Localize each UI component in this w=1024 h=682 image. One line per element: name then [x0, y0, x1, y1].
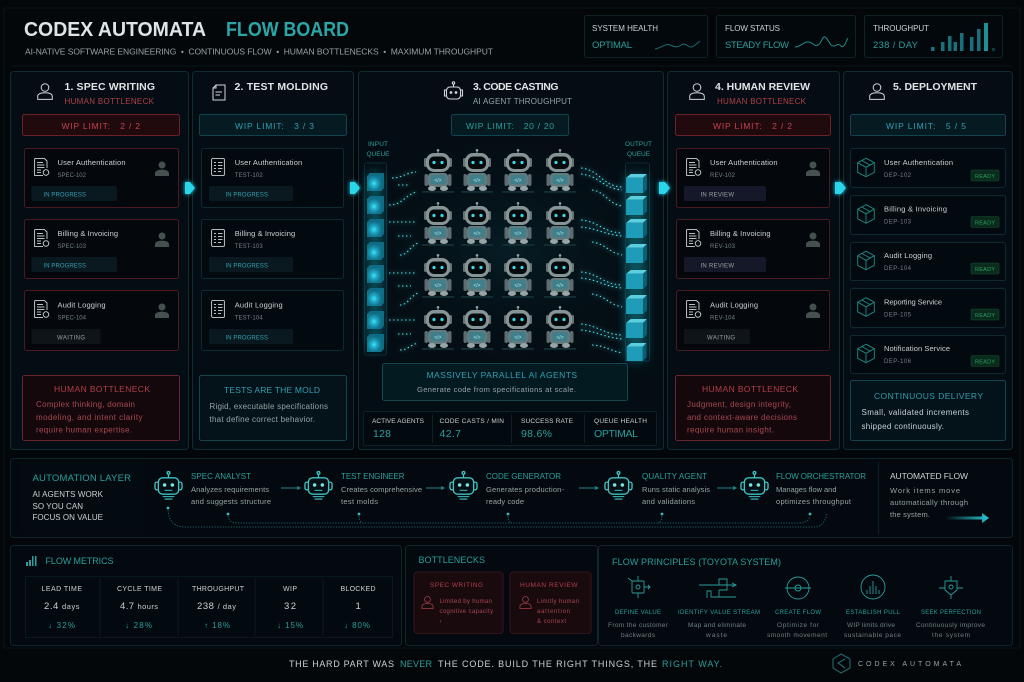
- wip limit: [452, 114, 568, 136]
- agent row 4: </>: [434, 335, 442, 341]
- footer tagline: THE CODE. BUILD THE RIGHT THINGS, THE: [438, 659, 657, 669]
- arrow: [426, 486, 444, 490]
- agent row 3: </>: [514, 283, 522, 289]
- card: billing and invoicing: IN PROGRESS: [44, 264, 86, 270]
- heading: FLOW METRICS: [46, 556, 114, 566]
- wip limit: WIP LIMIT: 20 / 20: [466, 121, 554, 131]
- bottleneck: human review: aattention: [537, 609, 570, 615]
- footer tagline: THE HARD PART WAS: [289, 659, 394, 669]
- panel: 1 spec writing: [10, 72, 188, 450]
- card: notification service: Notification Service: [884, 344, 950, 353]
- header title: CODEX AUTOMATA: [24, 19, 206, 41]
- status: throughput: [864, 16, 1002, 58]
- card: audit logging: [850, 242, 1006, 280]
- stats row: 98.6%: [521, 428, 552, 440]
- principle: establish pull: WIP limits drive: [847, 622, 895, 629]
- callout: continuous delivery: [850, 380, 1006, 440]
- callout: tests are the mold: [200, 376, 346, 440]
- agent: quality agent: and validations: [642, 497, 695, 506]
- card: billing and invoicing: TEST-103: [235, 244, 263, 250]
- agent row 2: </>: [514, 231, 522, 237]
- principle: define value: From the customer: [608, 622, 669, 629]
- card: audit logging: IN PROGRESS: [226, 336, 268, 342]
- card: reporting service: READY: [975, 313, 995, 319]
- agent: flow orchestrator: Manages flow and: [776, 485, 836, 494]
- metric: throughput: [192, 586, 245, 630]
- card: audit logging: Audit Logging: [884, 251, 932, 260]
- heading: 5. DEPLOYMENT: [893, 81, 978, 93]
- wip limit: WIP LIMIT: 3 / 3: [235, 121, 314, 131]
- callout: human bottleneck: require human insight.: [687, 426, 774, 434]
- card: audit logging: Audit Logging: [710, 300, 758, 310]
- arrow: [717, 486, 736, 490]
- input queue: QUEUE: [366, 151, 390, 158]
- card: user authentication: User Authentication: [710, 158, 778, 167]
- card: user authentication: SPEC-102: [58, 173, 87, 179]
- automation intro: [32, 473, 131, 522]
- agent: spec analyst: and suggests structure: [191, 497, 271, 506]
- agent row 4: [422, 306, 576, 350]
- footer logo: CODEX AUTOMATA: [858, 661, 961, 668]
- panel: bottlenecks: [406, 546, 598, 646]
- input queue: [364, 141, 390, 355]
- bottleneck: human review: Limitly human: [537, 599, 579, 605]
- callout: tests are the mold: that define correct behavior.: [210, 415, 315, 424]
- header subtitle: AI-NATIVE SOFTWARE ENGINEERING • CONTINUOUS FLOW • HUMAN BOTTLENECKS • MAXIMUM THROUGHPUT: [25, 46, 493, 56]
- stats row: 42.7: [440, 428, 461, 440]
- card: user authentication: [24, 148, 178, 208]
- output queue: [625, 141, 652, 361]
- feedback loop: [167, 507, 827, 527]
- heading: AI AGENT THROUGHPUT: [473, 97, 572, 106]
- card: billing and invoicing: [24, 220, 178, 278]
- footer tagline: NEVER: [400, 659, 432, 669]
- agent row 1: </>: [473, 178, 481, 184]
- heading: [715, 81, 810, 106]
- agent row 1: </>: [434, 178, 442, 184]
- bottleneck: spec writing: cognitive capacity: [440, 609, 493, 615]
- icon: person: [38, 84, 52, 99]
- bottleneck: human review: & context: [537, 619, 566, 625]
- heading: 3. CODE CASTING: [473, 81, 558, 93]
- card: billing and invoicing: Billing & Invoicing: [884, 204, 947, 214]
- icon: bars: [26, 556, 36, 566]
- card: user authentication: User Authentication: [58, 158, 126, 167]
- callout: human bottleneck: [22, 376, 180, 440]
- principle: create flow: Optimize for: [777, 622, 820, 629]
- callout: human bottleneck: modeling, and intent clarity: [36, 413, 142, 422]
- agent row 2: [422, 202, 576, 246]
- metric: wip: WIP: [283, 586, 297, 593]
- card: billing and invoicing: Billing & Invoicing: [235, 229, 295, 238]
- card: billing and invoicing: REV-103: [710, 244, 736, 250]
- wip limit: WIP LIMIT: 5 / 5: [886, 121, 966, 131]
- wip limit: [200, 114, 346, 136]
- card: billing and invoicing: IN PROGRESS: [226, 264, 268, 270]
- automated flow: AUTOMATED FLOW: [890, 471, 968, 481]
- card: billing and invoicing: Billing & Invoicing: [58, 229, 118, 238]
- agent: code generator: CODE GENERATOR: [486, 472, 561, 481]
- automated flow: Work items move: [890, 486, 960, 495]
- agent: spec analyst: [155, 472, 271, 506]
- principle: define value: DEFINE VALUE: [615, 610, 661, 616]
- principle: define value: [608, 576, 669, 639]
- principle: seek perfection: [916, 576, 985, 639]
- card: audit logging: WAITING: [57, 336, 85, 342]
- card: billing and invoicing: [676, 220, 830, 278]
- header title: FLOW BOARD: [226, 19, 349, 41]
- card: audit logging: REV-104: [710, 316, 736, 322]
- agent: test engineer: TEST ENGINEER: [341, 472, 405, 481]
- agent: test engineer: [305, 472, 422, 506]
- metric: blocked: 1: [356, 601, 361, 612]
- agent row 2: </>: [434, 231, 442, 237]
- card: user authentication: [850, 148, 1006, 188]
- stats row: CODE CASTS / MIN: [440, 418, 504, 425]
- metric: blocked: BLOCKED: [340, 586, 376, 593]
- card: audit logging: WAITING: [707, 336, 735, 342]
- card: user authentication: [202, 148, 344, 208]
- panel: 3 code casting: [358, 72, 664, 450]
- automation intro: SO YOU CAN: [32, 502, 83, 511]
- heading: 4. HUMAN REVIEW: [715, 81, 810, 93]
- card: user authentication: User Authentication: [884, 158, 953, 167]
- agent row 3: </>: [556, 283, 564, 289]
- card: audit logging: Audit Logging: [58, 300, 106, 310]
- agent row 1: </>: [556, 178, 564, 184]
- metric: blocked: [340, 586, 376, 630]
- stats row: ACTIVE AGENTS: [372, 418, 425, 425]
- metric: throughput: 238 / day: [197, 601, 236, 612]
- automation intro: FOCUS ON VALUE: [32, 513, 103, 522]
- heading: 1. SPEC WRITING: [64, 81, 155, 93]
- heading: [473, 81, 572, 106]
- heading: BOTTLENECKS: [418, 555, 485, 565]
- status: flow status: FLOW STATUS: [725, 24, 780, 33]
- metric: throughput: ↑ 18%: [204, 621, 230, 630]
- card: audit logging: READY: [975, 267, 995, 273]
- callout: human bottleneck: HUMAN BOTTLENECK: [702, 384, 798, 394]
- card: billing and invoicing: [850, 196, 1006, 234]
- agent: flow orchestrator: optimizes throughput: [776, 497, 852, 506]
- callout: human bottleneck: and context-aware decisions: [687, 413, 797, 422]
- agent: flow orchestrator: [741, 472, 866, 506]
- callout: human bottleneck: Complex thinking, domain: [36, 400, 135, 409]
- card: user authentication: READY: [975, 174, 995, 180]
- agent row 4: </>: [473, 335, 481, 341]
- agent row 2: </>: [556, 231, 564, 237]
- automation intro: AUTOMATION LAYER: [32, 473, 131, 484]
- automated flow: [890, 471, 989, 523]
- agent: test engineer: Creates comprehensive: [341, 485, 422, 494]
- card: user authentication: [676, 148, 830, 208]
- footer logo: [833, 654, 961, 673]
- stats row: QUEUE HEALTH: [594, 418, 647, 425]
- card: reporting service: DEP-105: [884, 312, 912, 318]
- card: audit logging: TEST-104: [235, 316, 263, 322]
- callout: tests are the mold: TESTS ARE THE MOLD: [224, 385, 320, 395]
- heading: HUMAN BOTTLENECK: [717, 97, 807, 106]
- status: system health: [584, 16, 708, 58]
- banner: massively parallel: Generate code from specifications at scale.: [417, 385, 576, 394]
- callout: continuous delivery: shipped continuously.: [862, 422, 944, 431]
- callout: continuous delivery: CONTINUOUS DELIVERY: [874, 391, 983, 401]
- heading: [64, 81, 155, 106]
- bottleneck: spec writing: Limited by human: [440, 599, 492, 605]
- heading: HUMAN BOTTLENECK: [64, 97, 155, 106]
- card: audit logging: [676, 290, 830, 350]
- bottleneck: spec writing: [414, 572, 503, 634]
- callout: human bottleneck: [676, 376, 830, 440]
- input queue: INPUT: [368, 141, 388, 148]
- card: notification service: DEP-106: [884, 359, 912, 365]
- card: reporting service: Reporting Service: [884, 298, 942, 306]
- agent row 4: </>: [514, 335, 522, 341]
- agent: quality agent: QUALITY AGENT: [642, 472, 707, 481]
- header title: [24, 19, 349, 41]
- agent: code generator: Generates production-: [486, 485, 564, 494]
- panel: automation layer: [10, 458, 1012, 538]
- agent: quality agent: [605, 472, 710, 506]
- callout: human bottleneck: HUMAN BOTTLENECK: [54, 384, 150, 394]
- metric: cycle time: 4.7 hours: [120, 601, 158, 612]
- panel: flow metrics: [10, 546, 402, 646]
- agent: code generator: ready code: [486, 497, 524, 506]
- panel: 5 deployment: [844, 72, 1012, 450]
- principle: create flow: CREATE FLOW: [775, 610, 821, 616]
- footer tagline: RIGHT WAY.: [662, 659, 722, 669]
- agent grid: [422, 149, 576, 350]
- card: audit logging: [24, 290, 178, 350]
- metric: lead time: 2.4 days: [44, 601, 80, 612]
- agent: spec analyst: Analyzes requirements: [191, 485, 269, 494]
- stats row: OPTIMAL: [594, 428, 638, 440]
- icon: person: [870, 84, 884, 99]
- principle: define value: backwards: [621, 632, 656, 639]
- principle: establish pull: ESTABLISH PULL: [846, 610, 901, 616]
- agent row 3: [422, 254, 576, 298]
- metric: blocked: ↓ 80%: [344, 621, 370, 630]
- bottleneck: human review: HUMAN REVIEW: [520, 582, 578, 589]
- stats row: 128: [373, 428, 391, 440]
- agent: flow orchestrator: FLOW ORCHESTRATOR: [776, 472, 866, 481]
- card: user authentication: TEST-102: [235, 173, 263, 179]
- arrow: [579, 486, 598, 490]
- agent row 4: </>: [556, 335, 564, 341]
- callout: human bottleneck: Judgment, design integrity,: [687, 400, 791, 409]
- arrow: test to casting: [350, 182, 360, 194]
- card: notification service: READY: [975, 360, 995, 366]
- card: audit logging: SPEC-104: [58, 316, 87, 322]
- panel: 2 test molding: [192, 72, 354, 450]
- agent flow lines: [389, 168, 622, 353]
- icon: robot head: [444, 82, 462, 99]
- metric: lead time: ↓ 32%: [48, 621, 75, 630]
- card: user authentication: REV-102: [710, 173, 736, 179]
- output queue: OUTPUT: [625, 141, 652, 148]
- callout: human bottleneck: require human expertise.: [36, 426, 132, 434]
- card: audit logging: DEP-104: [884, 266, 912, 272]
- status: flow status: [716, 16, 856, 58]
- bottleneck: spec writing: ›: [440, 619, 442, 625]
- card: audit logging: [202, 290, 344, 350]
- principle: identify value stream: Map and eliminate: [688, 622, 746, 629]
- status: system health: SYSTEM HEALTH: [592, 24, 658, 33]
- banner: massively parallel: MASSIVELY PARALLEL AI AGENTS: [426, 370, 577, 380]
- agent row 2: </>: [473, 231, 481, 237]
- status: throughput: THROUGHPUT: [873, 24, 929, 33]
- card: billing and invoicing: DEP-103: [884, 220, 912, 226]
- card: user authentication: DEP-102: [884, 173, 912, 179]
- wip limit: WIP LIMIT: 2 / 2: [713, 121, 792, 131]
- heading: 2. TEST MOLDING: [234, 81, 328, 93]
- card: billing and invoicing: [202, 220, 344, 278]
- metric: cycle time: CYCLE TIME: [117, 586, 162, 593]
- agent: test engineer: test molds: [341, 497, 378, 506]
- agent: spec analyst: SPEC ANALYST: [191, 472, 251, 481]
- stats row: SUCCESS RATE: [521, 418, 574, 425]
- metrics table: [26, 576, 392, 638]
- principle: establish pull: sustainable pace: [844, 632, 901, 639]
- card: reporting service: [850, 288, 1006, 328]
- arrow: casting to review: [659, 182, 670, 194]
- status: flow status: STEADY FLOW: [725, 40, 789, 51]
- card: user authentication: IN PROGRESS: [44, 192, 86, 198]
- card: audit logging: Audit Logging: [235, 300, 283, 310]
- metric: throughput: THROUGHPUT: [192, 586, 245, 593]
- metric: wip: [277, 586, 303, 630]
- banner: massively parallel: [382, 364, 628, 400]
- agent row 1: </>: [514, 178, 522, 184]
- arrow: spec to test: [185, 182, 195, 194]
- principle: identify value stream: IDENTIFY VALUE STREAM: [678, 610, 760, 616]
- wip limit: WIP LIMIT: 2 / 2: [62, 121, 140, 131]
- bottleneck: human review: [510, 572, 591, 634]
- principle: seek perfection: Continuously improve: [916, 622, 985, 629]
- agent: code generator: [450, 472, 564, 506]
- card: user authentication: User Authentication: [235, 158, 302, 167]
- metric: lead time: [42, 586, 82, 630]
- agent: quality agent: Runs static analysis: [642, 485, 710, 494]
- principle: create flow: smooth movement: [767, 632, 827, 639]
- icon: document: [213, 85, 225, 100]
- principle: create flow: [767, 577, 827, 639]
- panel: flow principles: [598, 546, 1012, 646]
- metric: wip: ↓ 15%: [277, 621, 303, 630]
- footer tagline: [289, 659, 722, 669]
- automation intro: AI AGENTS WORK: [32, 490, 104, 499]
- stats row: [364, 412, 656, 446]
- principle: establish pull: [844, 575, 901, 639]
- principle: identify value stream: waste: [705, 632, 727, 639]
- agent row 1: [422, 149, 576, 193]
- bottleneck: spec writing: SPEC WRITING: [430, 582, 483, 589]
- principle: seek perfection: the system: [932, 632, 970, 639]
- metric: wip: 32: [284, 601, 296, 612]
- automated flow: the system.: [890, 510, 930, 519]
- card: billing and invoicing: SPEC-103: [58, 244, 87, 250]
- wip limit: [676, 114, 830, 136]
- metric: lead time: LEAD TIME: [42, 586, 82, 593]
- card: billing and invoicing: IN REVIEW: [700, 264, 734, 270]
- wip limit: [850, 114, 1006, 136]
- card: user authentication: IN PROGRESS: [226, 192, 268, 198]
- arrow: review to deployment: [835, 182, 846, 194]
- metric: cycle time: [117, 586, 162, 630]
- metric: cycle time: ↓ 28%: [125, 621, 152, 630]
- principle: seek perfection: SEEK PERFECTION: [921, 610, 981, 616]
- heading: FLOW PRINCIPLES (TOYOTA SYSTEM): [612, 557, 781, 567]
- callout: tests are the mold: Rigid, executable specifications: [210, 402, 328, 411]
- panel: 4 human review: [668, 72, 840, 450]
- card: billing and invoicing: Billing & Invoicing: [710, 229, 770, 238]
- card: notification service: [850, 336, 1006, 374]
- card: billing and invoicing: READY: [975, 220, 995, 226]
- arrow: [281, 486, 300, 490]
- callout: continuous delivery: Small, validated increments: [862, 408, 969, 417]
- card: user authentication: IN REVIEW: [700, 192, 734, 198]
- principle: identify value stream: [678, 579, 760, 639]
- automated flow: automatically through: [890, 498, 968, 507]
- agent row 3: </>: [473, 283, 481, 289]
- agent row 3: </>: [434, 283, 442, 289]
- status: system health: OPTIMAL: [592, 40, 632, 51]
- wip limit: [22, 114, 180, 136]
- output queue: QUEUE: [627, 151, 651, 158]
- status: throughput: 238 / DAY: [873, 40, 919, 51]
- icon: person: [690, 84, 704, 99]
